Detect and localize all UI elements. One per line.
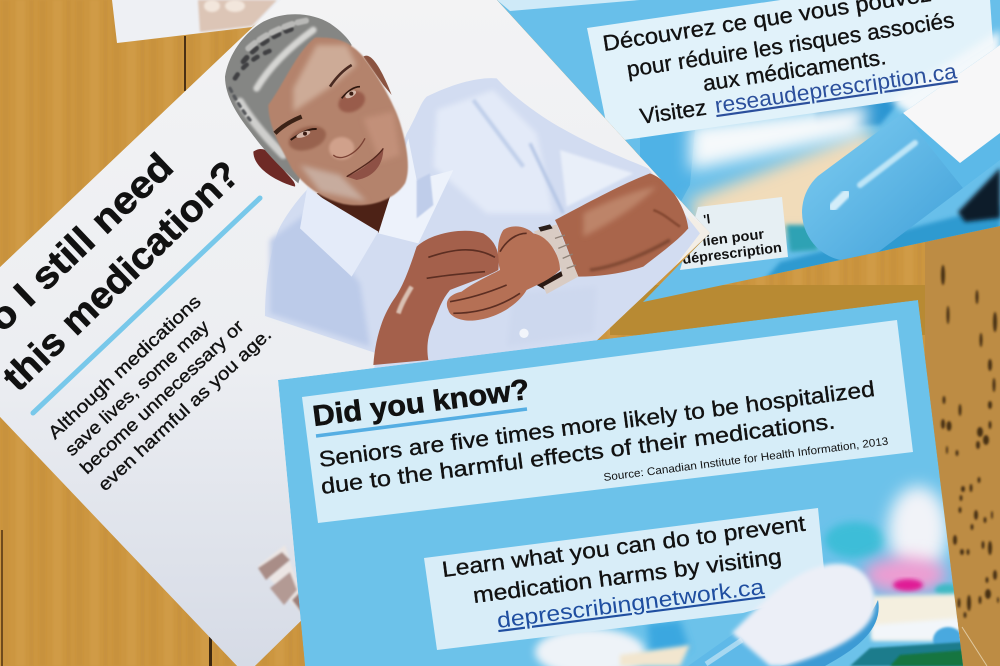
skin xyxy=(268,38,408,205)
fact text: Seniors are five times more likely to be hospitalized xyxy=(317,376,876,472)
source: Source: Canadian Institute for Health Information, 2013 xyxy=(603,436,889,484)
French small logo box: 'l xyxy=(703,211,711,227)
French text box xyxy=(587,0,993,142)
body text: even harmful as you age. xyxy=(94,324,275,495)
headline: this medication? xyxy=(0,153,248,399)
English capsule xyxy=(688,564,879,666)
heading: did you know: Did you know? xyxy=(311,374,531,433)
pills photo strip along card edge xyxy=(600,216,710,338)
shirt xyxy=(265,78,700,373)
blurred pills in French card xyxy=(640,95,1000,300)
man photo xyxy=(225,14,700,373)
heading rule xyxy=(316,409,527,436)
hair xyxy=(225,14,352,183)
ears xyxy=(253,149,295,187)
pills photo corner, lower card xyxy=(257,546,300,612)
call to action: Learn what you can do to prevent xyxy=(440,511,807,582)
text box: learn more xyxy=(424,508,826,650)
French message text: reseaudeprescription.ca xyxy=(713,58,959,118)
blurred pills background xyxy=(535,486,966,666)
watch xyxy=(533,224,578,294)
dark wood knots xyxy=(941,265,999,618)
fact text: due to the harmful effects of their medications. xyxy=(319,408,836,499)
call to action: deprescribingnetwork.ca xyxy=(495,574,766,633)
fact text xyxy=(317,376,876,499)
French small logo box: lien pour xyxy=(701,225,765,249)
small postcard corner at top xyxy=(112,0,285,43)
panel: English postcard xyxy=(278,300,966,666)
face and head xyxy=(225,14,453,277)
body text: Although medications xyxy=(44,291,205,443)
forearm xyxy=(555,173,688,277)
call to action xyxy=(440,511,807,633)
collar xyxy=(300,187,378,277)
nose and mouth xyxy=(333,138,365,158)
French capsule xyxy=(802,45,1000,261)
body text: become unnecessary or xyxy=(76,316,248,478)
French small logo box xyxy=(680,197,788,270)
body text: save lives, some may xyxy=(61,316,213,460)
call to action: medication harms by visiting xyxy=(471,544,783,608)
panel: French postcard xyxy=(490,0,1000,310)
French message text: aux médicaments. xyxy=(701,44,888,96)
arm and hands xyxy=(373,173,688,365)
wrist shadow xyxy=(536,271,563,290)
accent line xyxy=(33,198,260,413)
French message text: pour réduire les risques associés xyxy=(625,7,956,82)
French message text: Visitez xyxy=(638,95,708,129)
upper hand, fist xyxy=(373,231,499,365)
text box: did you know xyxy=(302,320,913,523)
lower hand, palm up xyxy=(447,226,560,321)
panel: white postcard with man xyxy=(0,0,712,666)
French message text xyxy=(603,0,958,124)
eyes xyxy=(288,125,327,152)
French small logo box: déprescription xyxy=(681,239,783,267)
body text xyxy=(44,291,275,495)
knuckle highlight and creases xyxy=(398,287,412,313)
neck xyxy=(316,192,390,233)
